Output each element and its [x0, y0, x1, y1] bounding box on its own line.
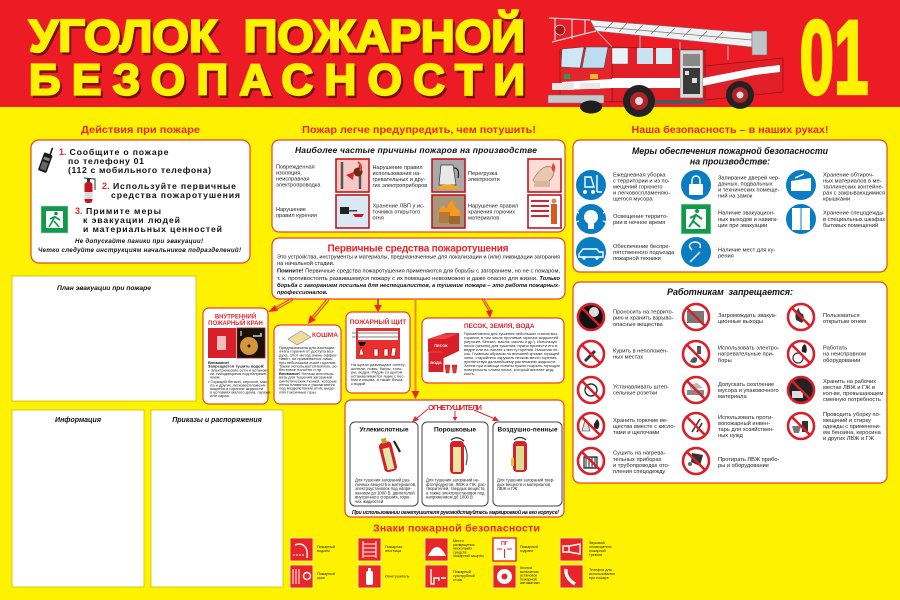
measure: locks [681, 170, 780, 200]
panel: orders: Приказы и распоряжения [172, 417, 262, 424]
card: fire board [346, 312, 410, 393]
cause: flammable liquids: огня [372, 216, 384, 222]
measure: smoking places: рения [718, 254, 734, 260]
text: step 3 [75, 206, 222, 234]
ban: washing with gasoline [788, 412, 882, 442]
sign: equipment place: средств [453, 550, 467, 554]
ban: drying: Сушить на нагрева- [613, 451, 666, 457]
card text: поверхность слоем песка, который впитает жид- [464, 367, 555, 372]
sign: activation button: автоматики [520, 581, 540, 585]
panel: information [12, 410, 144, 587]
card text: ком и кошма, а также бочка [351, 377, 403, 382]
ban: washing with gasoline: одежды с применени- [823, 424, 881, 430]
card: fire hydrant [203, 308, 271, 404]
measure: cleaning: Ежедневная уборка [613, 172, 666, 178]
measure: lighting [576, 204, 668, 234]
ban: acids: тами и щелочами [613, 430, 659, 436]
icon: sand box and water barrel [428, 333, 459, 373]
sign: activation button: установок [520, 574, 537, 578]
card text: ки, находящиеся под напряже- [210, 371, 268, 376]
arrow: to extinguishers [412, 299, 420, 399]
card text: • Электрические сети и установ- [208, 368, 269, 372]
cause: insulation [276, 159, 369, 192]
sign: telephone [560, 565, 615, 588]
sign: sound alarm [560, 538, 612, 561]
text: step 3: и материальных ценностей [83, 224, 222, 234]
ban: heaters: Использовать электро- [718, 346, 779, 352]
text: Для тушения загораний твер- [497, 478, 555, 482]
panel body text: профессионалов. [277, 289, 328, 296]
ban: smoking: Курить в неположен- [613, 349, 668, 355]
ban: heaters: боры [718, 358, 732, 364]
ban: fire equipment: ных нужд [718, 433, 744, 439]
sign: activation button: включения [520, 570, 539, 574]
text: warning [38, 238, 241, 254]
ban: acids: Хранить горючие ве- [613, 418, 668, 424]
sign: equipment place [425, 538, 484, 561]
text: step 1: (112 с мобильного телефона) [68, 165, 211, 175]
cause: storage [468, 195, 561, 228]
card text: кость. [464, 371, 475, 376]
measure: smoking places: Наличие мест для ку- [718, 248, 775, 254]
text: а также электроустановок под [426, 490, 485, 495]
icon: foam extinguisher [511, 438, 527, 472]
ban: waste: Допускать скопление [718, 382, 774, 388]
ban: wiping: Протирать ЛВЖ прибо- [718, 457, 779, 463]
card text: песок (землю) для тушения, нужно принести его в [464, 343, 557, 348]
measure: lighting: рии в ночное время [613, 220, 665, 226]
ban: sockets [578, 377, 669, 403]
sign: sound alarm: Звуковой [589, 541, 605, 545]
ban: explosives: рию и хранить взрыво- [613, 316, 674, 322]
text: внутреннего сгорания, горю- [355, 495, 411, 500]
cause: flammable liquids [372, 195, 465, 228]
icon: fire truck [548, 18, 783, 117]
ban: open flame: Пользоваться [823, 313, 860, 319]
text: личных веществ и материалов, [355, 482, 416, 487]
card text: бестовое полотно и пр. [279, 367, 322, 372]
heading: our safety: Наша безопасность – в наших руках! [632, 124, 828, 136]
cause: insulation: Поврежденная [276, 164, 315, 170]
text: step 3: Примите меры [86, 206, 161, 216]
card text: Запрещается тушить водой: [208, 364, 264, 368]
sign: ladder [358, 538, 402, 561]
measure: exits [681, 204, 778, 234]
ban: storing fuel: Хранить на рабочих [823, 379, 876, 385]
text: step 3: к эвакуации людей [83, 215, 180, 225]
card: foam: Воздушно-пенные [498, 426, 558, 434]
sign: sound alarm: оповещатель [589, 545, 612, 549]
measure: metal containers: Хранение обтироч- [823, 172, 874, 178]
text: напряжением до 1000 В [426, 495, 473, 500]
text: творителей, твердых веществ, [426, 486, 486, 491]
ban: open flame [788, 304, 866, 330]
card text: под воздействием огня, выде- [279, 386, 336, 391]
card title: ПОЖАРНЫЙ КРАН [208, 319, 263, 327]
sign: activation button: Кнопка [520, 566, 533, 570]
measure: cleaning [576, 170, 670, 202]
card text: зоны, старайтесь окружить песком место горения, [464, 355, 558, 360]
measure: metal containers [786, 170, 885, 202]
ban: faulty equipment: на неисправном [823, 352, 866, 358]
ban: washing with gasoline: ем бензина, керосина [823, 430, 882, 436]
cause: flammable liquids: точника открытого [372, 210, 420, 216]
card text: Внимание! [279, 371, 300, 376]
ban: acids [578, 413, 676, 439]
text: Для тушения загораний не- [426, 478, 480, 482]
card title: ПОЖАРНЫЙ ЩИТ [350, 317, 406, 326]
sign: hydrant: гидрант [520, 549, 534, 553]
measure: locks: и технических помеще- [718, 188, 780, 194]
ban: storing fuel: сменную потребность [823, 397, 881, 403]
title: УГОЛОК ПОЖАРНОЙ [29, 10, 525, 62]
ban: open flame: открытым огнем [823, 319, 866, 325]
ban: fire equipment [683, 413, 774, 439]
sign: fire hose: водоем [317, 549, 330, 553]
sign: activation button [493, 565, 540, 588]
panel: orders [151, 410, 283, 587]
card text: ведре или на лопате к месту горения. Насыпая пе- [464, 347, 559, 352]
panel title: на производстве: [690, 156, 770, 166]
ban: washing with gasoline: и других ЛВЖ и ГЖ [823, 436, 875, 442]
card title: КОШМА [312, 332, 338, 339]
ban: faulty equipment: оборудовании [823, 358, 860, 364]
icon: blanket [288, 331, 311, 345]
card text: препятствуя дальнейшему растеканию жидкости. [464, 359, 556, 364]
sign: telephone: при пожаре [589, 576, 609, 580]
sign: activation button: пожарной [520, 577, 537, 581]
ban: explosives: Проносить на террито- [613, 310, 674, 316]
text: Для тушения загораний раз- [355, 478, 411, 482]
cause: overload: Перегрузка [468, 171, 498, 177]
panel title: Меры обеспечения пожарной безопасности [632, 146, 829, 156]
panel title: Наиболее частые причины пожаров на производстве [295, 145, 537, 155]
icon: mobile phone [38, 146, 55, 173]
cause: smoking [276, 195, 369, 228]
sign: extinguisher: Огнетушитель [385, 574, 409, 578]
cause: insulation: неисправная [276, 176, 310, 182]
ban: sockets: сельные розетки [613, 391, 657, 397]
ban: drying: пления спецодежду [613, 469, 665, 475]
card text: ющиеся и горючие жидкости [210, 386, 263, 391]
ban: washing with gasoline: мещений и стирку [823, 417, 871, 424]
ban: faulty equipment: Работать [823, 346, 847, 352]
arrow: to fire board [374, 299, 382, 312]
sign: fire hose [290, 538, 335, 561]
ban: drying: и трубопроводах ото- [613, 463, 670, 469]
measure: smoking places [681, 237, 775, 267]
icon: sand box and water barrel: ПЕСОК [434, 344, 448, 348]
panel: causes of fire [272, 140, 565, 232]
cause: heaters [372, 159, 465, 192]
measure: locks: Запирание дверей чер- [718, 174, 780, 182]
sign: extinguisher [358, 565, 409, 588]
icon: powder extinguisher [450, 438, 467, 474]
measure: cleaning: щегося мусора [613, 196, 653, 202]
header band [0, 0, 900, 107]
cause: insulation: изоляция, [276, 170, 302, 176]
measure: locks: ний на замок [718, 192, 753, 200]
cause: insulation: электропроводка [276, 182, 321, 188]
ban: waste [683, 377, 779, 403]
measure: exits: Наличие эвакуацион- [718, 210, 775, 216]
ban: waste: материала [718, 394, 747, 400]
card: CO2 [350, 422, 418, 506]
heading: prevent: Пожар легче предупредить, чем потушить! [302, 124, 536, 136]
ban: fire equipment: Использовать проти- [718, 415, 773, 421]
measure: exits: ции при эвакуации [718, 223, 767, 229]
card text: Применяются для тушения небольших очагов воз- [464, 331, 559, 336]
cause: heaters: использования на- [372, 171, 421, 177]
ban: heaters: нагревательные при- [718, 352, 774, 358]
card text: сок, Главным образом по внешней кромке горящей [464, 351, 559, 356]
ban: acids: щества вместе с кисло- [613, 424, 676, 430]
cause: overload: электросети [468, 177, 500, 183]
text: step 2 [102, 181, 240, 200]
cause: smoking: правил курения [276, 213, 317, 219]
cause: heaters: Нарушение правил [372, 165, 423, 171]
ban: explosives [578, 304, 674, 330]
card text: Затем при помощи лопаты нужно покрыть горящую [464, 363, 560, 368]
card text: в условиях малого дома, гаража [210, 390, 271, 394]
panel body text [277, 253, 561, 296]
card text: вать для тушения загораний [279, 375, 332, 380]
card text: ры, ведра. Рядом со щитом [351, 370, 403, 375]
image: hose [237, 328, 265, 358]
sign: fire tap: кран [317, 576, 325, 580]
card text: тивен, но применяется лишь [279, 356, 332, 361]
text: step 1 [59, 147, 211, 175]
card: foam [493, 422, 562, 506]
ban: drying [578, 448, 670, 475]
card: sand, earth, water [422, 318, 564, 383]
text: warning: Четко следуйте инструкциям начальников подразделений! [38, 247, 241, 254]
sign: equipment place: Место [453, 539, 464, 543]
measure: exits: ных выходов и навига- [718, 217, 778, 223]
sign: dry pipe: Пожарный [453, 570, 471, 574]
measure: metal containers: рах с закрывающимися [823, 190, 885, 196]
card text: шители, ломы, багры, топо- [351, 366, 403, 371]
ban: sockets: Устанавливать штеп- [613, 385, 669, 391]
measure: metal containers: крышками [823, 196, 850, 202]
cause: storage: Нарушение правил [468, 204, 518, 210]
ban: fire equipment: тарь для хозяйствен- [718, 426, 774, 433]
sign: equipment place: нескольких [453, 547, 472, 551]
measure: wardrobes: Хранение спецодежды [823, 210, 883, 216]
card text: нием; [210, 374, 221, 380]
card: CO2: Углекислотные [360, 426, 409, 434]
arrow: to sand [482, 299, 493, 318]
ban: blocking exits: Загромождать эвакуа- [718, 313, 777, 319]
ban: storing fuel: местах ЛВЖ и ГЖ в [823, 385, 875, 391]
arrow: to blanket [308, 299, 329, 324]
measure: wardrobes: в специальных шкафах [823, 217, 885, 223]
ban: explosives: опасные вещества [613, 322, 664, 328]
card text: легко плавятся и разлагаются [279, 382, 335, 387]
measure: wardrobes [786, 204, 885, 234]
sign: hydrant [493, 538, 538, 561]
text: step 2: Используйте первичные [113, 181, 236, 191]
panel body text: на начальной стадии. [277, 260, 335, 267]
ban: drying: тельных приборах [613, 457, 662, 463]
text: step 1: по телефону 01 [68, 156, 144, 166]
card text: (керосин, бензин, масла, смолы и др.). Используя [464, 339, 557, 344]
sign: ladder: лестница [385, 549, 402, 553]
cause: heaters: гревательных и дру- [372, 177, 426, 183]
sign: sound alarm: пожарной [589, 549, 606, 553]
ban: storing fuel [788, 377, 883, 403]
panel: actions in a fire [31, 140, 250, 263]
panel title: Работникам запрещается: [667, 287, 793, 297]
text: дых веществ и материалов, [497, 482, 551, 487]
sign: fire tap [290, 565, 335, 588]
arrow: to hydrant [268, 298, 293, 312]
measure: access: Обеспечение беспре- [613, 244, 670, 250]
measure: cleaning: и легковоспламеняю- [613, 190, 670, 196]
text: step 3: 3. [75, 206, 83, 216]
card text: духа. Этот метод очень эффек- [279, 352, 338, 357]
card text: синтетических тканей, которые [279, 378, 338, 383]
measure: metal containers: таллических контейне- [823, 184, 884, 190]
card text: или сарая. [210, 393, 230, 398]
title [29, 10, 527, 107]
ban: fire equipment: вопожарный инвен- [718, 420, 770, 427]
card: powder [422, 422, 488, 506]
card text: очага горения от доступа воз- [279, 349, 335, 354]
measure: access [576, 237, 675, 267]
text: электроустановок под напря- [355, 486, 412, 491]
cause: smoking: Нарушение [276, 207, 306, 213]
ban: smoking: ных местах [613, 355, 643, 361]
text: step 1: 1. [59, 147, 67, 157]
ban: smoking [578, 341, 668, 367]
heading: safety signs: Знаки пожарной безопасности [373, 522, 540, 534]
panel body text: т. к. противостоять развившемуся пожару с их помощью невозможно и даже опасно для жизни. Только [277, 276, 561, 282]
text: step 2: 2. [102, 181, 110, 191]
heading: actions: Действия при пожаре [81, 124, 200, 136]
sign: hydrant: Пожарный [520, 545, 538, 549]
ban: blocking exits: ционные выходы [718, 319, 763, 325]
card text: с водой. [351, 381, 366, 386]
measure: cleaning: с территории и из по- [613, 178, 670, 184]
panel body text: борьба с загоранием посильна для неспециалистов, а тушение пожара – это работа пожарных- [277, 282, 560, 289]
text: step 1: Сообщите о пожаре [70, 147, 169, 157]
arrows to extinguisher types [412, 409, 499, 422]
cause: overload [468, 159, 561, 192]
icon: exit sign [41, 206, 68, 233]
title: БЕЗОПАСНОСТИ [29, 56, 525, 104]
card text: ляя токсичные газы. [279, 389, 317, 394]
measure: access: пожарной техники [613, 255, 661, 262]
cause: heaters: гих электроприборов [372, 183, 427, 189]
card title: ПЕСОК, ЗЕМЛЯ, ВОДА [464, 323, 535, 330]
card text: Внимание! [208, 360, 229, 365]
text: ЛВЖ и ГЖ. [497, 486, 518, 491]
text: чих жидкостей [355, 499, 384, 504]
icon: CO2 extinguisher [377, 437, 398, 473]
text: фтепродуктов, ЛВЖ и ГЖ, рас- [426, 482, 487, 487]
sign: dry pipe: сухотрубный [453, 574, 475, 578]
card text: ла и другие легковоспламеня- [210, 382, 267, 388]
card text: • Горящий бензин, керосин, мас- [208, 379, 269, 384]
sign: dry pipe [425, 565, 475, 588]
icon: extinguisher [84, 178, 95, 203]
sign: telephone: использования [589, 572, 615, 576]
card: fire blanket [274, 325, 341, 404]
measure: metal containers: ных материалов в ме- [823, 178, 882, 184]
sign: fire tap: Пожарный [317, 572, 335, 576]
sign: fire hose: Пожарный [317, 545, 335, 549]
card text: Предназначена для изоляции [279, 345, 334, 350]
panel: information: Информация [55, 417, 101, 424]
cause: storage: хранения горючих [468, 210, 515, 216]
card title: ВНУТРЕННИЙ [215, 312, 256, 320]
ban: wiping [683, 448, 779, 474]
measure: lighting: Освещение террито- [613, 214, 668, 220]
ban: storing fuel: кол-ве, превышающем [823, 391, 883, 397]
panel: primary fire-fighting means [272, 238, 565, 299]
sign: equipment place: размещения [453, 543, 474, 547]
ban: wiping: ры и оборудование [718, 463, 769, 469]
image: board [352, 328, 400, 359]
sign: ladder: Пожарная [385, 545, 402, 549]
ban: washing with gasoline: Проводить уборку по- [823, 412, 881, 418]
sign: telephone: Телефон для [589, 568, 612, 572]
panel: fire extinguishers [345, 400, 564, 517]
panel: safety measures [573, 140, 887, 272]
card text: устанавливается ящик с пес- [351, 373, 406, 378]
title: БЕЗОПАСНОСТИ [31, 58, 527, 107]
panel: evacuation plan [12, 276, 196, 401]
measure: access: пятственного подъезда [613, 250, 675, 256]
ban: heaters [683, 341, 779, 367]
cause: flammable liquids: Хранение ЛВП у ис- [372, 204, 425, 210]
cause: storage: материалов [468, 216, 499, 222]
card text: горания, в том числе проливов горючих жидкостей [464, 335, 558, 340]
card: powder: Порошковые [434, 426, 476, 434]
card text: На щитах размещают огнету- [351, 362, 406, 367]
sign: sound alarm: тревоги [589, 553, 602, 557]
panel: prohibitions [573, 282, 887, 483]
text: warning: Не допускайте паники при эвакуации! [75, 238, 203, 245]
text: step 2: средства пожаротушения [111, 190, 240, 200]
ban: faulty equipment [788, 341, 866, 367]
sign: hydrant: ПГ [501, 541, 509, 547]
card text: при небольшом очаге горения. [279, 360, 336, 365]
title: УГОЛОК ПОЖАРНОЙ [31, 13, 527, 64]
panel body text: Это устройства, инструменты и материалы, предназначенные для локализации и (или) ликвидации загорания [277, 253, 560, 260]
measure: wardrobes: бытовых помещений [823, 222, 878, 229]
image: hydrant cabinet [208, 328, 236, 358]
card text: Нельзя использо- [300, 371, 335, 376]
sign: dry pipe: стояк [453, 578, 463, 582]
ban: waste: мусора и упаковочного [718, 388, 779, 394]
panel heading: ОГНЕТУШИТЕЛИ [428, 403, 482, 412]
card text: Также используется войлок, ас- [279, 364, 338, 368]
text: жением до 1000 В, двигателей [355, 490, 415, 495]
panel heading: Первичные средства пожаротушения [328, 244, 509, 254]
measure: cleaning: мещений горючего [613, 184, 663, 190]
note: При использовании огнетушителя руководствуйтесь маркировкой на его корпусе! [352, 509, 559, 516]
panel: evacuation plan: План эвакуации при пожаре [57, 285, 151, 292]
ban: blocking exits [683, 304, 777, 330]
panel body text: Помните! Первичные средства пожаротушения применяются для борьбы с загоранием, но не с пожаром, [277, 268, 560, 274]
sign: equipment place: пожарной защиты [453, 554, 484, 558]
icon: sand box and water barrel: ВОДА [430, 360, 442, 365]
measure: locks: дачных, подвальных [718, 182, 773, 188]
